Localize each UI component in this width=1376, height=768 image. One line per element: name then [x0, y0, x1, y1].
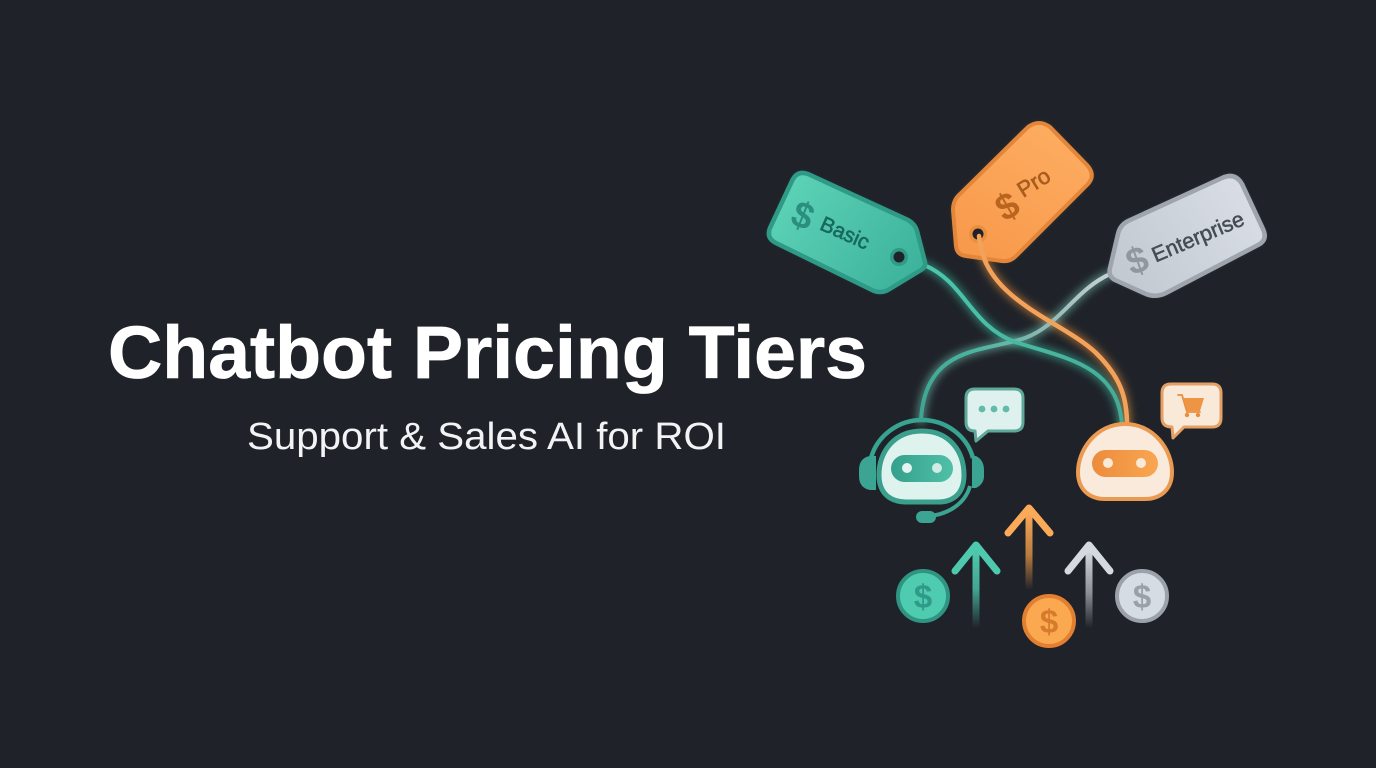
- tag: Enterprise: Enterprise: [1148, 207, 1248, 267]
- speech bubble with dots: [966, 389, 1023, 441]
- tag: Pro: [953, 123, 1092, 262]
- coin: teal: $: [914, 578, 932, 615]
- arrow: teal growth: [955, 545, 997, 628]
- coin: orange: [1024, 596, 1074, 646]
- title: Chatbot Pricing Tiers: [108, 311, 867, 394]
- wire: enterprise tag to support robot: [921, 274, 1110, 420]
- tag: Pro: $: [988, 183, 1027, 229]
- wire: basic tag to sales robot: [924, 265, 1122, 425]
- icon: cart: [1178, 395, 1204, 417]
- tag: Enterprise: [1110, 176, 1265, 296]
- coin: teal: [898, 571, 948, 621]
- sales robot: [1078, 424, 1172, 499]
- connecting wires from tags to robots: [921, 238, 1127, 425]
- headset ear pads: [859, 456, 876, 490]
- speech bubble with shopping cart: [1162, 384, 1221, 438]
- coin: orange: $: [1040, 603, 1058, 640]
- microphone: [916, 486, 970, 523]
- robot head: [1078, 424, 1172, 499]
- subtitle: Support & Sales AI for ROI: [247, 416, 726, 458]
- support robot with headset: [859, 420, 984, 523]
- wire: pro tag to sales robot: [979, 238, 1127, 425]
- headset band: [871, 420, 973, 458]
- eyes: [902, 463, 912, 473]
- tag: Basic: Basic: [817, 213, 873, 254]
- visor: [891, 455, 953, 482]
- tag: Basic: [769, 173, 925, 292]
- tag: Basic: $: [786, 193, 820, 238]
- tag: Enterprise: $: [1120, 238, 1154, 283]
- visor: [1092, 450, 1158, 477]
- arrow: orange growth: [1008, 508, 1050, 590]
- wire start over the tag: [979, 236, 986, 262]
- coin: gray: $: [1133, 578, 1151, 615]
- arrow: gray growth: [1068, 545, 1110, 628]
- eyes: [1103, 458, 1113, 468]
- coin: gray: [1117, 571, 1167, 621]
- robot head: [879, 431, 964, 502]
- tag: Pro: Pro: [1013, 163, 1055, 202]
